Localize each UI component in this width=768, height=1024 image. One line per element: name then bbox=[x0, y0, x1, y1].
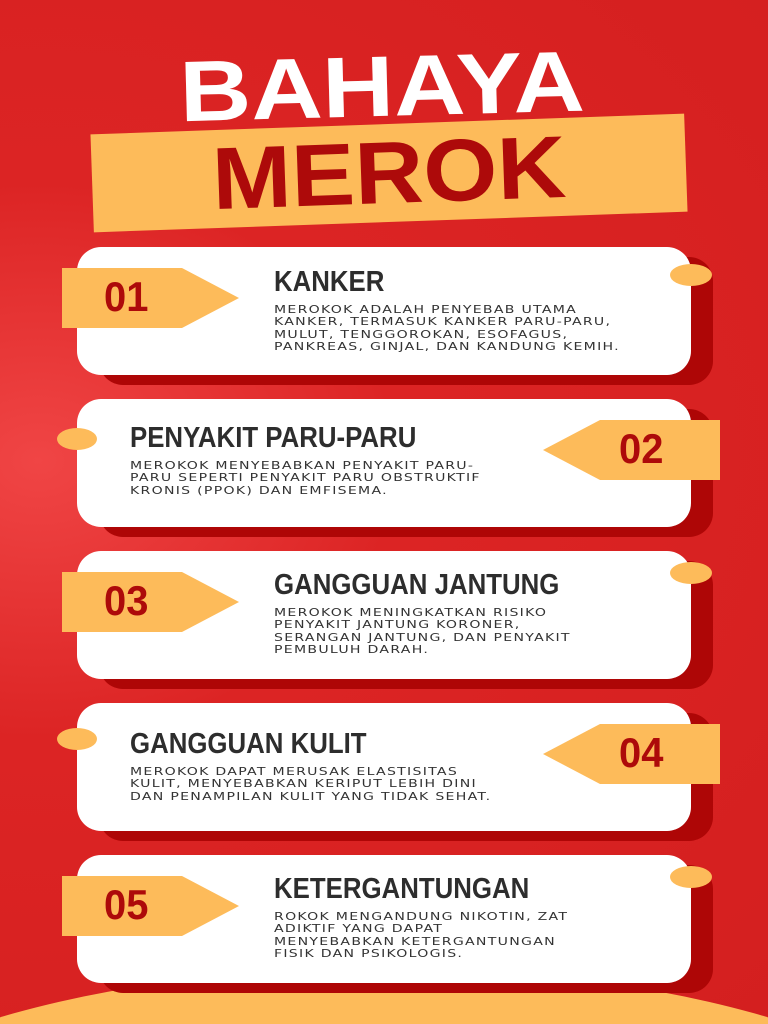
panel 04: GANGGUAN KULIT bbox=[130, 728, 367, 760]
panel 02 bbox=[57, 399, 720, 537]
panel 04: DAN PENAMPILAN KULIT YANG TIDAK SEHAT. bbox=[130, 790, 491, 803]
panel 01: KANKER, TERMASUK KANKER PARU-PARU, bbox=[274, 315, 611, 328]
panel 03 bbox=[62, 551, 713, 689]
tag 04: 04 bbox=[619, 729, 663, 776]
tag 01: 01 bbox=[104, 273, 148, 320]
panel 04: KULIT, MENYEBABKAN KERIPUT LEBIH DINI bbox=[130, 777, 477, 790]
panel 03: MEROKOK MENINGKATKAN RISIKO bbox=[274, 606, 547, 619]
banner: MEROK bbox=[90, 114, 688, 232]
panel 01: MULUT, TENGGOROKAN, ESOFAGUS, bbox=[274, 328, 568, 341]
tag 02: 02 bbox=[619, 425, 663, 472]
panel 05: MENYEBABKAN KETERGANTUNGAN bbox=[274, 935, 556, 948]
panel 04 bbox=[57, 703, 720, 841]
panel 01 bbox=[62, 247, 713, 385]
panel 05: KETERGANTUNGAN bbox=[274, 873, 529, 905]
tag 05 bbox=[62, 876, 239, 936]
panel 02: KRONIS (PPOK) DAN EMFISEMA. bbox=[130, 484, 388, 497]
tag 04 bbox=[543, 724, 720, 784]
panel 01: PANKREAS, GINJAL, DAN KANDUNG KEMIH. bbox=[274, 340, 620, 353]
banner: MEROK: MEROK bbox=[210, 117, 567, 228]
panel 03: GANGGUAN JANTUNG bbox=[274, 569, 559, 601]
tag 02 bbox=[543, 420, 720, 480]
tag 01 bbox=[62, 268, 239, 328]
panel 03: PEMBULUH DARAH. bbox=[274, 643, 429, 656]
panel 05: ROKOK MENGANDUNG NIKOTIN, ZAT bbox=[274, 910, 568, 923]
panel 04: MEROKOK DAPAT MERUSAK ELASTISITAS bbox=[130, 765, 458, 778]
tag 05: 05 bbox=[104, 881, 148, 928]
panel 03: SERANGAN JANTUNG, DAN PENYAKIT bbox=[274, 631, 571, 644]
panel 01: MEROKOK ADALAH PENYEBAB UTAMA bbox=[274, 303, 577, 316]
panel 05 bbox=[62, 855, 713, 993]
title: BAHAYA: BAHAYA bbox=[178, 34, 586, 140]
panel 02: MEROKOK MENYEBABKAN PENYAKIT PARU- bbox=[130, 459, 474, 472]
panel 05: FISIK DAN PSIKOLOGIS. bbox=[274, 947, 463, 960]
panel 03: PENYAKIT JANTUNG KORONER, bbox=[274, 618, 521, 631]
panel 02: PENYAKIT PARU-PARU bbox=[130, 422, 416, 454]
panel 02: PARU SEPERTI PENYAKIT PARU OBSTRUKTIF bbox=[130, 471, 481, 484]
heading: KANKER bbox=[274, 266, 384, 298]
bottom yellow arc bbox=[0, 990, 768, 1024]
panel 05: ADIKTIF YANG DAPAT bbox=[274, 922, 443, 935]
tag 03 bbox=[62, 572, 239, 632]
tag 03: 03 bbox=[104, 577, 148, 624]
